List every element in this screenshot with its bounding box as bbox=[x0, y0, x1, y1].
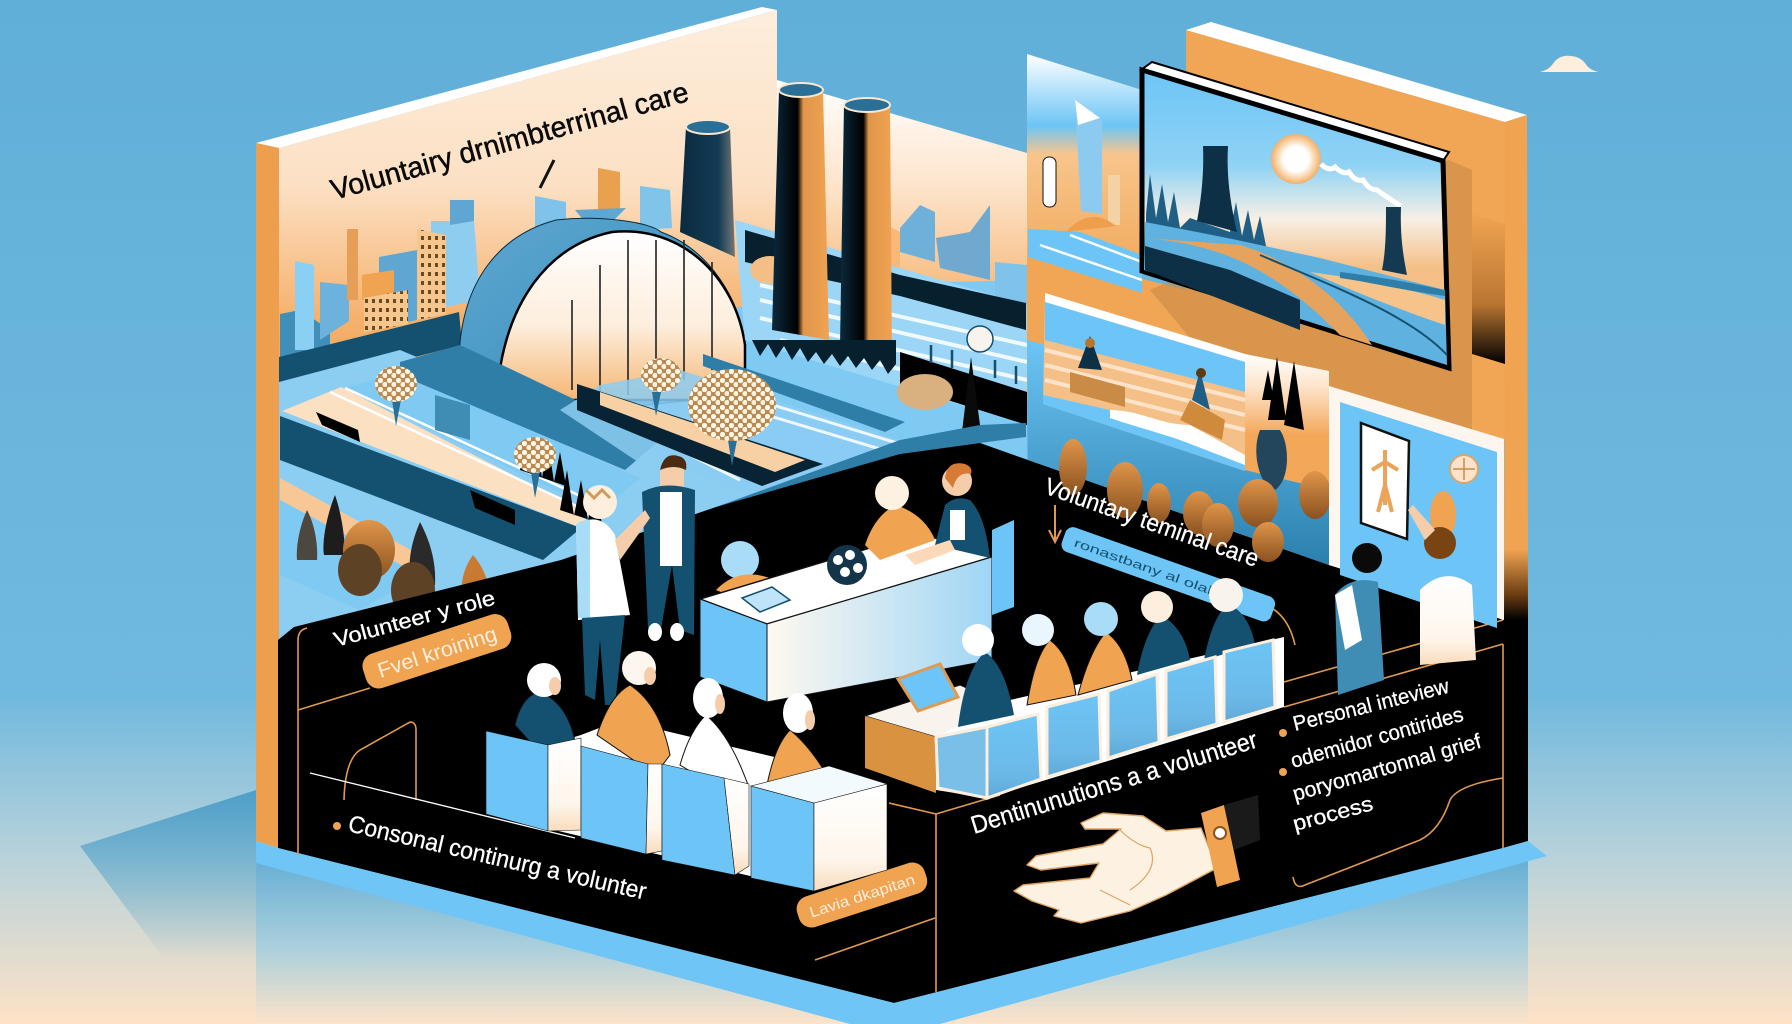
person 2 bbox=[597, 651, 670, 775]
panel: left wall bbox=[256, 7, 777, 848]
poster bbox=[1361, 423, 1409, 539]
distant buildings bbox=[860, 205, 1027, 310]
person 1 bbox=[515, 663, 577, 770]
text: bullet list: process bbox=[1290, 792, 1376, 836]
text: continuing: Consonal continurg a volunter bbox=[346, 811, 649, 905]
arrow marker bbox=[1049, 505, 1061, 542]
panel: lower picture bbox=[1043, 293, 1245, 471]
standing right pair bbox=[1335, 505, 1476, 695]
skyline bbox=[279, 168, 672, 392]
person behind desk bbox=[716, 541, 775, 600]
panel: right back wall bbox=[1027, 22, 1528, 620]
blue callout bar bbox=[1059, 525, 1277, 624]
pill: fuel training: Fvel kroining bbox=[375, 623, 500, 683]
blue callout bar: ronastbany al olaling bbox=[1072, 536, 1237, 606]
cooling tower small bbox=[1382, 207, 1407, 275]
clock bbox=[1450, 455, 1478, 483]
bullets bbox=[1279, 729, 1287, 776]
far chimney bbox=[680, 120, 735, 257]
trees bbox=[297, 495, 490, 618]
spire tree bbox=[961, 357, 982, 440]
text outline frame bbox=[1293, 778, 1503, 886]
panel: dark base bbox=[278, 443, 1528, 1003]
right table with laptop bbox=[865, 637, 1284, 798]
flowers bbox=[375, 358, 776, 498]
text: bullet list bbox=[1288, 675, 1484, 836]
chair back row bbox=[486, 720, 887, 891]
panel: door bbox=[1329, 386, 1504, 628]
landscape bbox=[1144, 222, 1447, 365]
text: bullet list: poryomartonnal grief bbox=[1290, 730, 1484, 806]
flower arrangement bbox=[827, 545, 867, 585]
person 3 bbox=[680, 678, 748, 795]
cooling tower large bbox=[1197, 146, 1237, 232]
brown shrubs bbox=[1059, 439, 1331, 562]
chimneys bbox=[752, 83, 896, 374]
dome bbox=[459, 218, 745, 420]
text: bullet list: Personal inteview bbox=[1291, 675, 1452, 736]
ground shadow bbox=[80, 790, 1528, 1024]
pill: fuel training bbox=[359, 611, 515, 692]
chairs bbox=[486, 731, 887, 891]
steam bbox=[1321, 164, 1401, 206]
row of chairs bbox=[936, 640, 1275, 798]
panel: industrial scene backdrop bbox=[279, 80, 1027, 645]
panel: TV screen bbox=[1141, 62, 1449, 368]
standing pair bbox=[576, 455, 695, 705]
water and far bands bbox=[735, 220, 1027, 425]
bullet bbox=[333, 822, 341, 830]
skyline silhouette bbox=[1146, 174, 1346, 296]
pill: lower label: Lavia dkapitan bbox=[807, 871, 917, 922]
pill: lower label bbox=[793, 859, 931, 931]
text: voluntary terminal care: Voluntary teminal care bbox=[1041, 473, 1262, 573]
panel: peach strip with spikes bbox=[1245, 354, 1329, 490]
center desk bbox=[700, 533, 992, 702]
person 4 bbox=[767, 693, 840, 808]
text: definitions: Dentinunutions a a volunteer bbox=[968, 726, 1261, 840]
sun bbox=[1271, 134, 1321, 184]
poster figure bbox=[1372, 450, 1398, 512]
text: bullet list: odemidor contirides bbox=[1288, 703, 1466, 773]
seated group right bbox=[936, 578, 1275, 798]
icon: cloud bbox=[1540, 56, 1599, 72]
panel: upper picture bbox=[1027, 54, 1142, 293]
white rule bbox=[310, 773, 575, 838]
clock icon bbox=[931, 326, 1016, 384]
decorative lines bbox=[298, 600, 1503, 992]
seated group left bbox=[486, 651, 887, 891]
icon: open hand bbox=[1014, 795, 1260, 923]
icon: crane bbox=[540, 160, 554, 188]
title: Voluntairy drnimbterrinal care bbox=[327, 76, 692, 207]
seated staff bbox=[865, 463, 1014, 615]
text: volunteer role: Volunteer y role bbox=[331, 587, 498, 652]
blue floor edge bbox=[256, 841, 1547, 1024]
panel: blue lower scene bbox=[1027, 340, 1329, 565]
planter platforms bbox=[279, 345, 1026, 640]
